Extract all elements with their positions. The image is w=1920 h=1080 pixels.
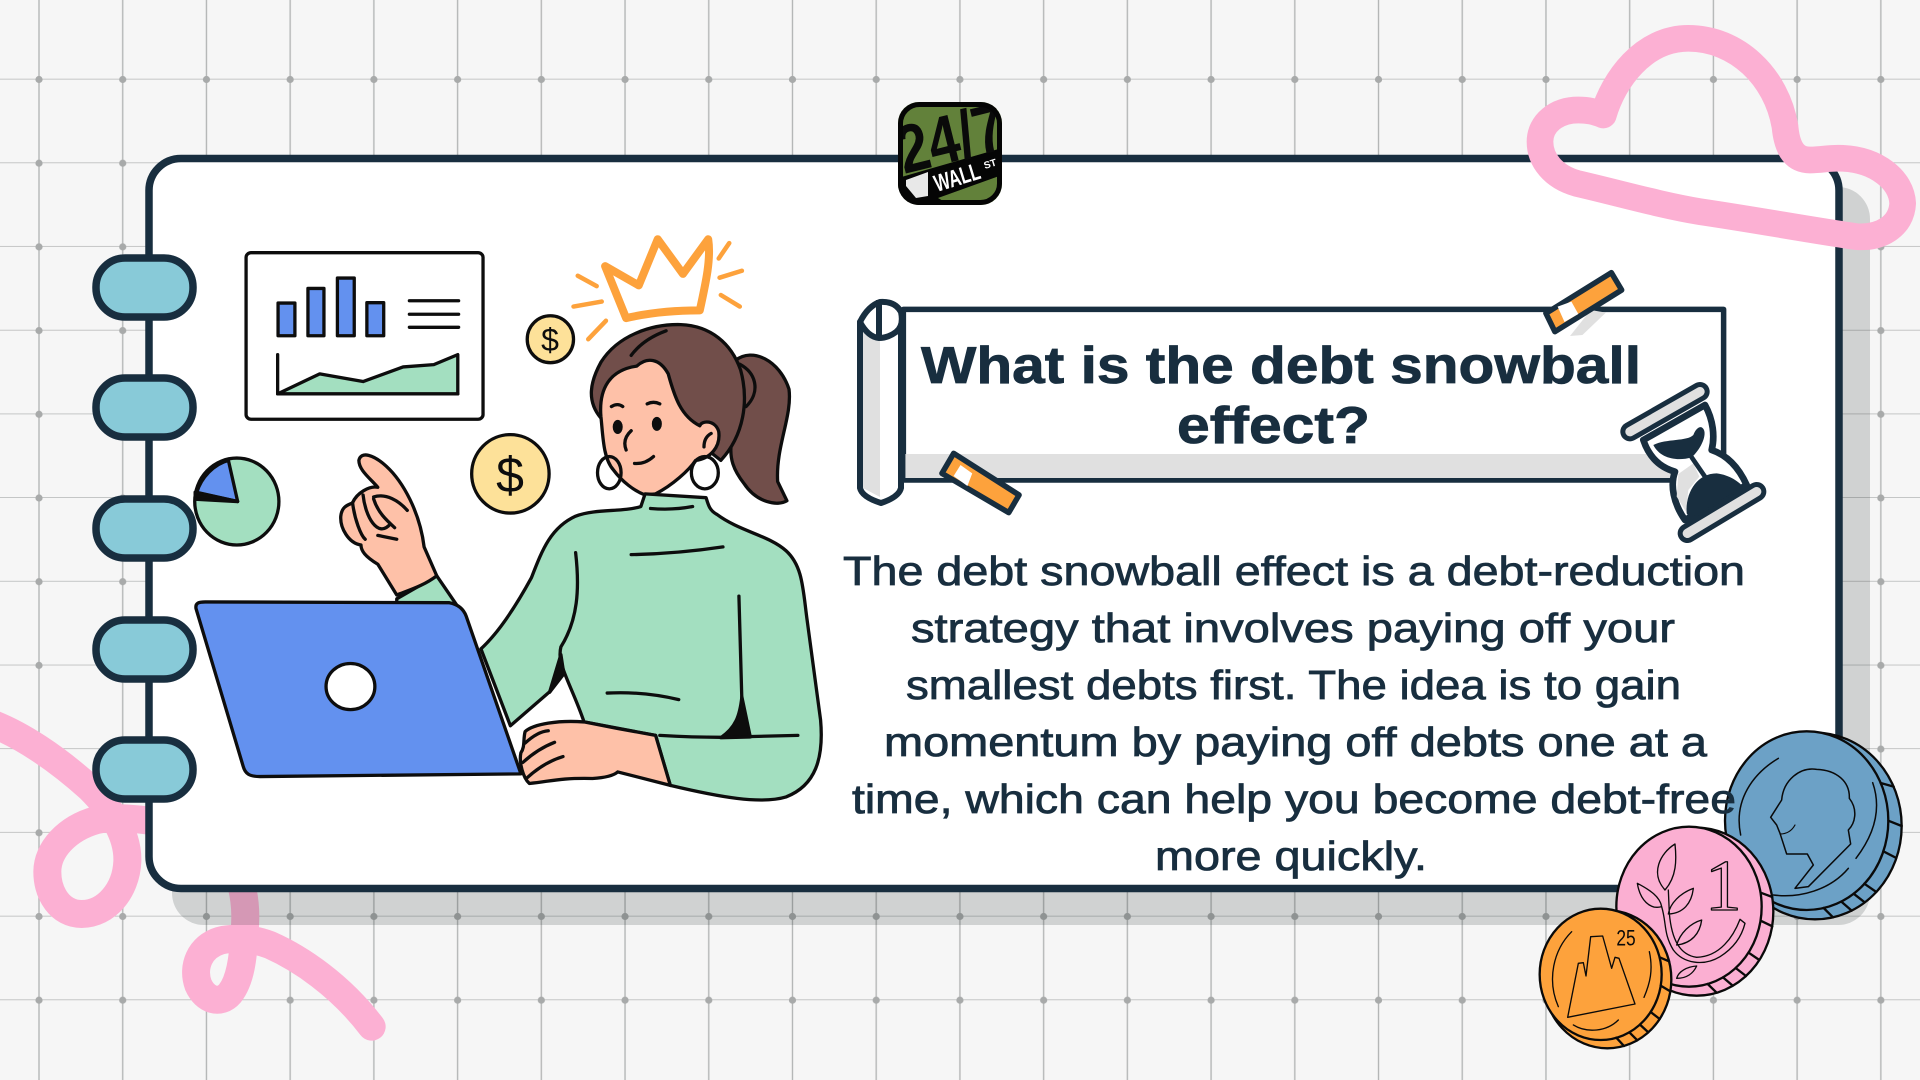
hourglass top cap — [1630, 392, 1700, 432]
earring left — [598, 457, 621, 489]
blue coin — [1725, 731, 1902, 919]
notebook card — [149, 158, 1839, 888]
coin numeral one: 1 — [1705, 845, 1742, 926]
sand top — [1653, 427, 1705, 459]
sand bottom — [1687, 473, 1743, 518]
body paragraph: smallest debts first. The idea is to gain — [906, 662, 1681, 708]
logo: 24/7 Wall St — [898, 102, 1002, 205]
body paragraph: strategy that involves paying off your — [911, 605, 1675, 651]
hourglass bottom cap — [1687, 492, 1757, 533]
banner sheet — [903, 309, 1724, 480]
sweater folds — [550, 507, 798, 738]
pink coin — [1616, 827, 1773, 996]
pink squiggle: left — [0, 722, 157, 914]
pink cloud scribble — [1540, 38, 1903, 237]
body paragraph: time, which can help you become debt-free — [852, 776, 1736, 822]
earring right — [691, 457, 718, 489]
pointing hand — [341, 455, 437, 595]
sweater — [481, 494, 821, 800]
body paragraph: The debt snowball effect is a debt-reduction — [843, 548, 1745, 594]
hourglass — [1630, 392, 1757, 533]
title scroll banner — [903, 273, 1724, 513]
logo band — [898, 148, 1002, 205]
laptop — [196, 602, 521, 777]
card shadow — [172, 187, 1870, 925]
face — [601, 360, 719, 495]
hair — [591, 325, 744, 460]
notebook rings — [96, 258, 193, 799]
tape top — [1546, 273, 1622, 336]
pink squiggle: lower left — [196, 880, 372, 1027]
illustration: woman at laptop — [195, 239, 821, 800]
logo building icon — [906, 172, 928, 198]
title: effect? — [1177, 397, 1370, 455]
logo frame — [900, 104, 1000, 202]
sleeve raised arm — [397, 576, 458, 607]
ponytail — [731, 355, 789, 503]
title — [921, 337, 1641, 455]
body paragraph: momentum by paying off debts one at a — [884, 719, 1707, 765]
leaf branch — [1637, 844, 1745, 978]
coin numeral 25: 25 — [1616, 925, 1636, 950]
body paragraph: more quickly. — [1155, 833, 1427, 879]
portrait — [1739, 758, 1877, 896]
logo wordmark Wall: WALL — [931, 158, 984, 198]
tape bottom — [942, 453, 1019, 513]
facial features — [611, 331, 711, 464]
coin small — [527, 316, 574, 363]
pie chart — [195, 458, 279, 545]
dollar sign small: $ — [541, 322, 559, 358]
chart board — [246, 253, 483, 419]
scroll roller — [860, 300, 902, 503]
laptop logo — [326, 663, 375, 710]
mountain — [1568, 936, 1635, 1017]
crown — [574, 239, 742, 339]
orange coin — [1540, 909, 1671, 1048]
resting hand — [520, 721, 670, 785]
title: What is the debt snowball — [921, 337, 1641, 395]
logo wordmark St: ST — [983, 158, 998, 172]
logo wordmark 24/7: 24/7 — [889, 89, 1012, 189]
coins stack — [1540, 731, 1902, 1048]
body paragraph — [843, 548, 1745, 879]
dollar sign large: $ — [496, 447, 524, 503]
coin large — [472, 435, 549, 513]
hourglass glass — [1643, 405, 1747, 520]
